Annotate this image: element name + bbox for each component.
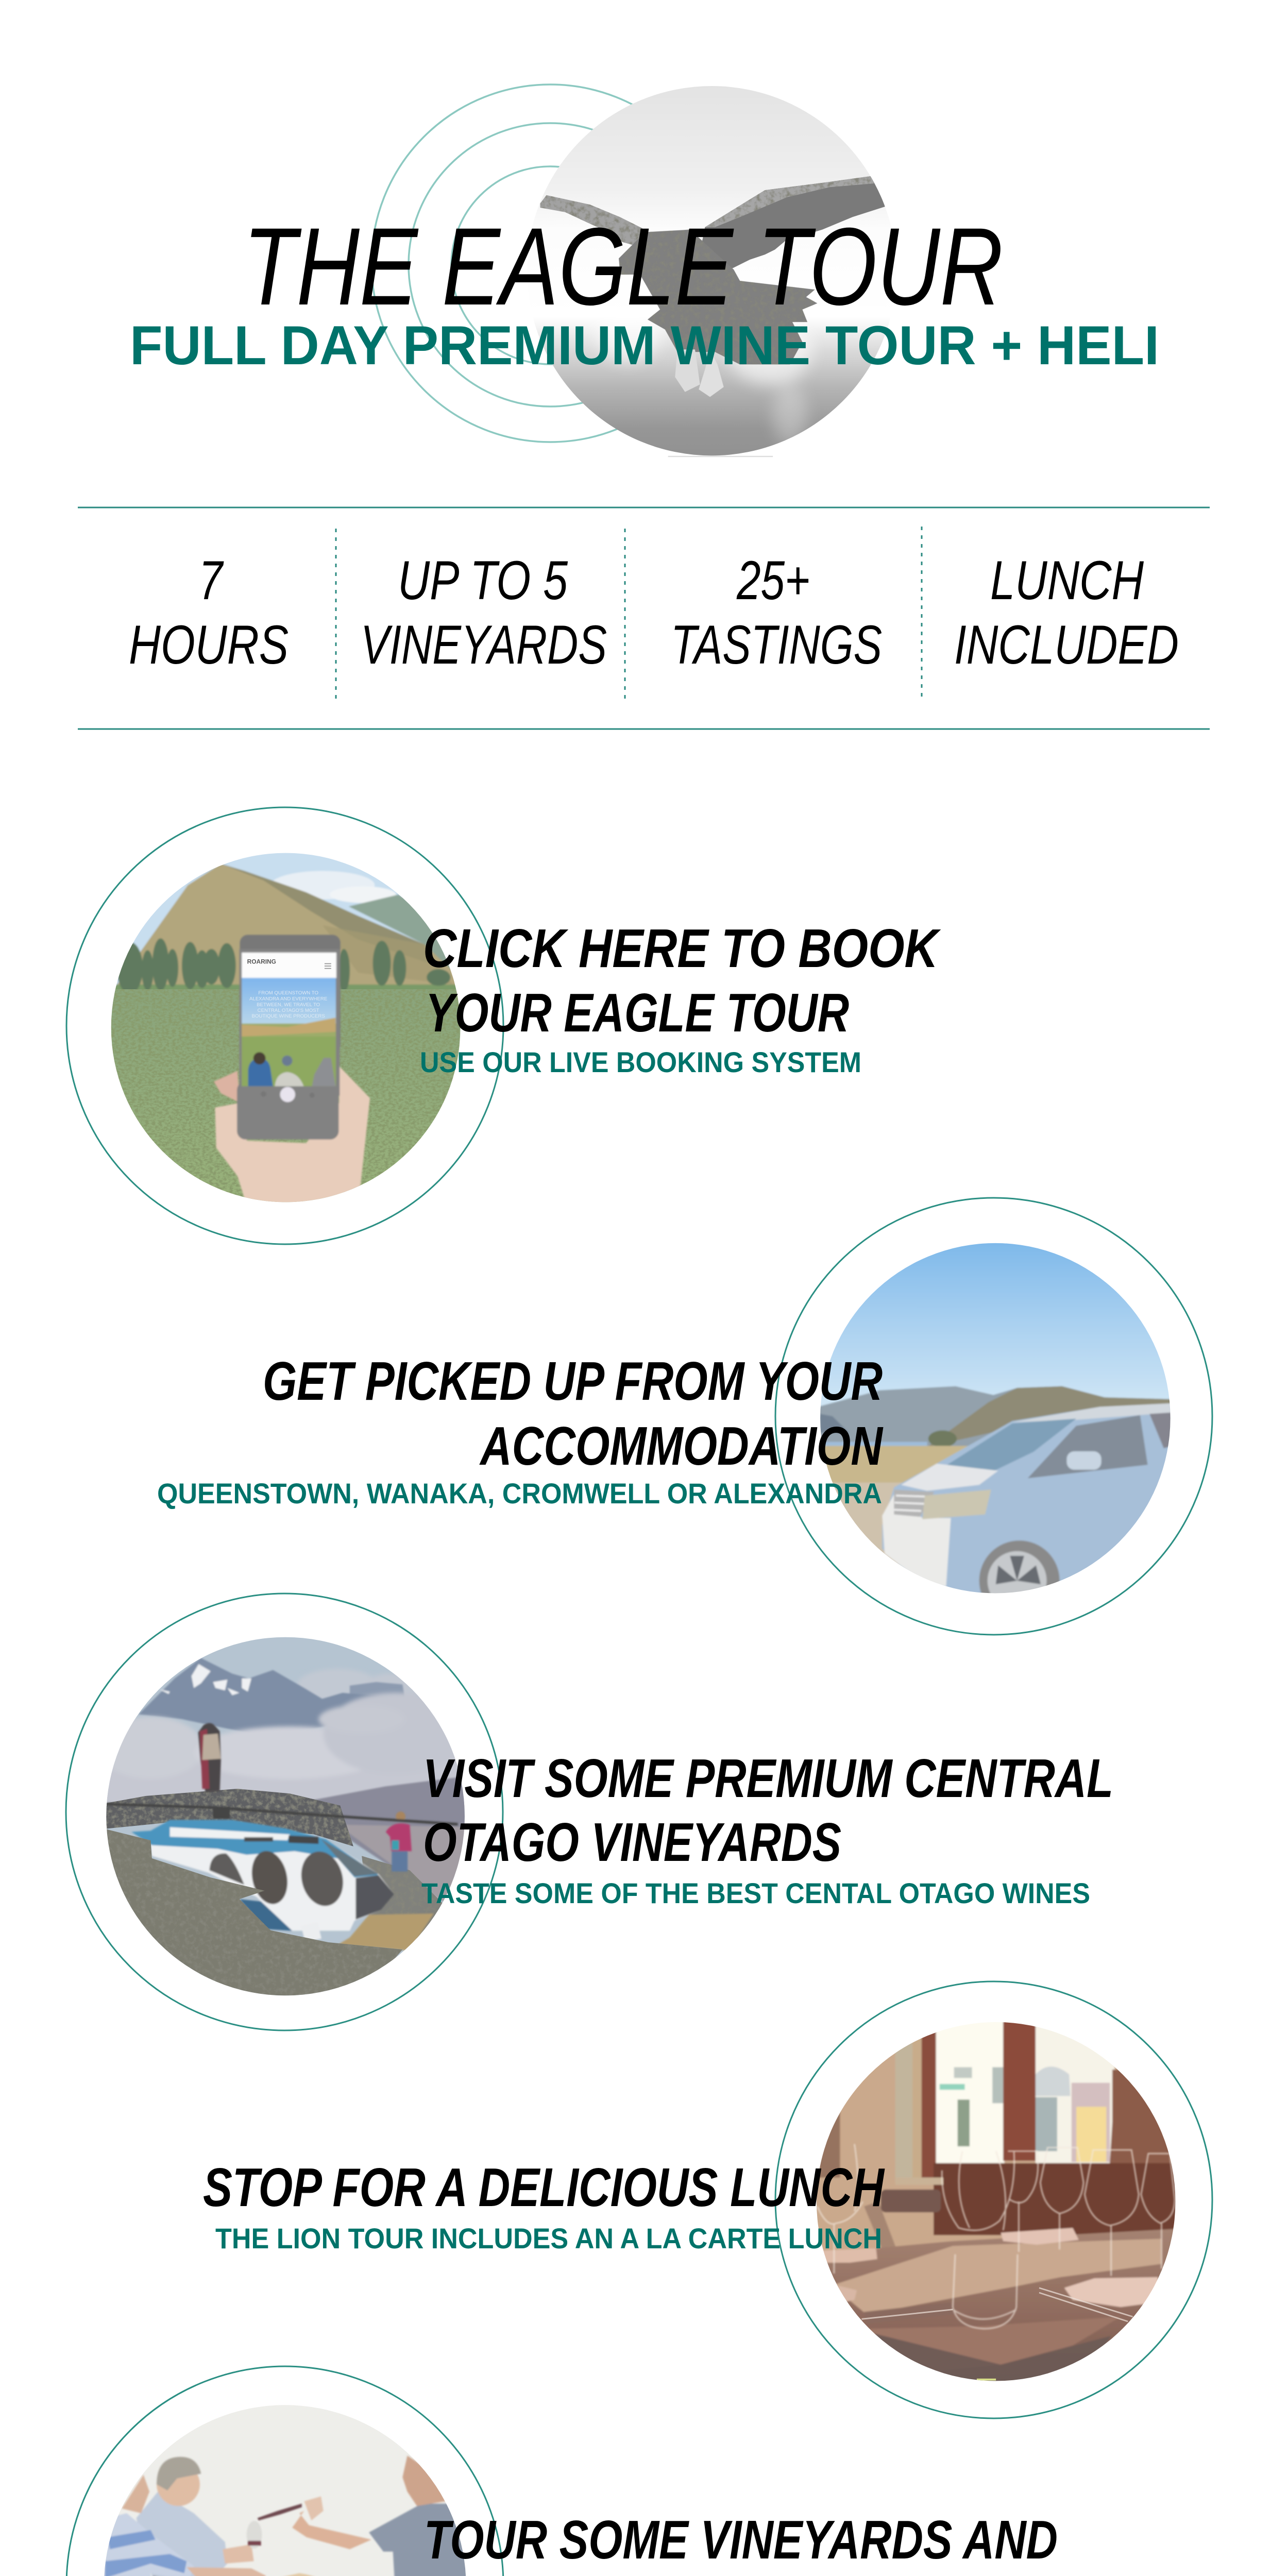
stat: 25+ tastings: 25+ [736,549,810,611]
step 1 text [420,918,941,1078]
ring: step 5 [66,2366,503,2576]
ring: step 2 [775,1198,1212,1635]
stat: up to 5 vineyards: UP TO 5 [398,549,568,611]
stat: 7 hours [129,549,289,675]
step 3 text: OTAGO VINEYARDS [423,1812,841,1873]
photo: phone booking in vineyard: CENTRAL OTAGO'S MOST [258,1008,319,1013]
subtitle: FULL DAY PREMIUM WINE TOUR + HELI [130,314,1159,376]
stat: 7 hours: 7 [199,549,224,611]
photo: phone booking in vineyard: FROM QUEENSTOWN TO [258,990,318,996]
step 1 text: YOUR EAGLE TOUR [426,982,849,1043]
stat: 25+ tastings [671,549,882,675]
photo: eagle in flight [535,86,888,457]
stat: up to 5 vineyards [361,549,607,675]
step 3 text: VISIT SOME PREMIUM CENTRAL [423,1748,1113,1809]
step 3 text: TASTE SOME OF THE BEST CENTAL OTAGO WINES [421,1877,1090,1909]
step 2 text [157,1351,884,1510]
photo: phone booking in vineyard: ROARING [247,958,276,965]
ring: step 4 [775,1981,1212,2418]
step 4 text: STOP FOR A DELICIOUS LUNCH [203,2157,885,2218]
stat: lunch included [954,549,1179,675]
step 2 text: GET PICKED UP FROM YOUR [263,1351,883,1412]
stat: lunch included: LUNCH [990,549,1144,611]
stat: up to 5 vineyards: VINEYARDS [361,614,607,675]
stat: 7 hours: HOURS [129,614,289,675]
stat: lunch included: INCLUDED [954,614,1179,675]
photo: barrel tasting in winery [104,2405,466,2576]
photo: phone booking in vineyard: ALEXANDRA AND EVERYWHERE [249,996,327,1002]
step 2 text: QUEENSTOWN, WANAKA, CROMWELL OR ALEXANDRA [157,1477,882,1510]
concentric rings behind eagle [371,84,729,442]
ring: step 1 [66,807,503,1244]
step 4 text [203,2157,885,2255]
step 1 text: CLICK HERE TO BOOK [423,918,941,979]
title: THE EAGLE TOUR [243,205,1003,328]
step 5 text: TOUR SOME VINEYARDS AND [424,2510,1058,2570]
step 4 text: THE LION TOUR INCLUDES AN A LA CARTE LUNCH [215,2222,882,2255]
stats panel [78,507,1210,729]
step 3 text [421,1748,1113,1909]
photo: helicopter on mountain [106,1637,465,1996]
photo: phone booking in vineyard: BOUTIQUE WINE PRODUCERS [252,1013,325,1019]
photo: restaurant table with wine glasses [816,2022,1176,2381]
ring: step 3 [66,1594,503,2030]
stat: 25+ tastings: TASTINGS [671,614,882,675]
step 1 text: USE OUR LIVE BOOKING SYSTEM [420,1046,861,1078]
photo: van with mountains [820,1243,1171,1593]
step 2 text: ACCOMMODATION [479,1416,884,1477]
photo: phone booking in vineyard: BETWEEN, WE TRAVEL TO [257,1002,320,1008]
photo: phone booking in vineyard [111,853,461,1202]
